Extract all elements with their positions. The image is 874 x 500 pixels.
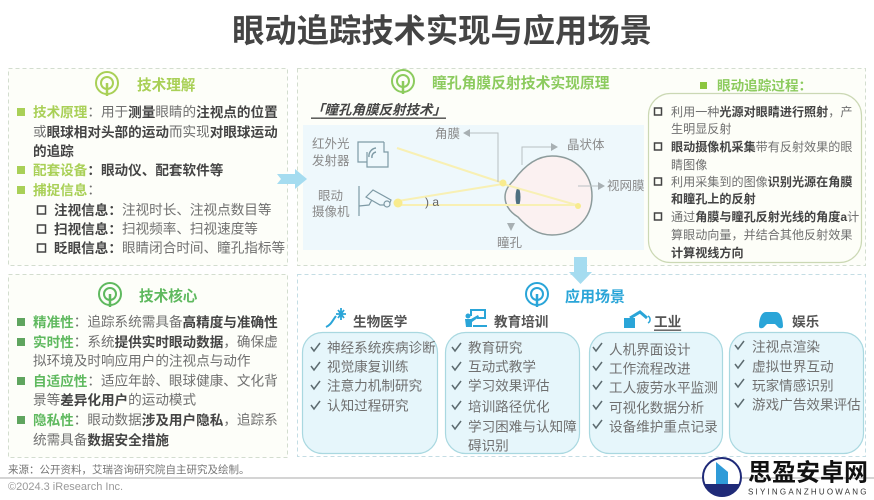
card: education: 教育研究 — [468, 340, 523, 356]
icon: camera — [359, 186, 391, 216]
lens label: 晶状体 — [567, 138, 605, 152]
card: biomedicine: 视觉康复训练 — [327, 358, 409, 374]
process box: 生明显反射 — [671, 121, 731, 136]
process box: 和瞳孔上的反射 — [671, 191, 756, 206]
card: industry — [590, 312, 722, 454]
process box: 利用采集到的图像识别光源在角膜 — [671, 174, 852, 189]
heading: technology core: 技术核心 — [139, 287, 198, 305]
card: industry: 工业 — [654, 314, 681, 330]
heading: application scenarios: 应用场景 — [565, 288, 625, 306]
panel: application scenarios — [298, 274, 866, 456]
eye diagram: 发射器 — [312, 153, 350, 168]
panel: technology core — [8, 274, 288, 458]
card: education: 学习困难与认知障 — [468, 418, 577, 434]
card: education — [446, 309, 580, 454]
icon: robot arm — [624, 312, 650, 328]
process box: 利用一种光源对眼睛进行照射，产 — [671, 104, 852, 119]
card: industry: 工作流程改进 — [609, 362, 691, 376]
icon: infrared emitter — [358, 142, 388, 167]
source note: 来源：公开资料，艾瑞咨询研究院自主研究及绘制。 — [8, 463, 250, 476]
copyright: ©2024.3 iResearch Inc. — [8, 481, 123, 493]
real-time: 实时性：系统提供实时眼动数据，确保虚 — [33, 334, 278, 350]
principle text: 技术原理：用于测量眼睛的注视点的位置 — [33, 104, 278, 120]
arrow: to principle — [277, 169, 307, 189]
icon: signal — [392, 70, 414, 94]
title: 眼动追踪技术实现与应用场景 — [232, 13, 652, 49]
adaptivity: 景等差异化用户的运动模式 — [33, 392, 197, 408]
icon: signal — [96, 72, 118, 96]
card: biomedicine: 神经系统疾病诊断 — [327, 340, 436, 356]
icon: neuron — [326, 308, 346, 327]
captured information list: 眨眼信息：眼睛闭合时间、瞳孔指标等 — [54, 240, 285, 256]
principle text: 的追踪 — [33, 142, 74, 158]
card: industry: 设备维护重点记录 — [609, 418, 718, 434]
card: biomedicine: 注意力机制研究 — [327, 378, 423, 394]
process title: 眼动追踪过程： — [717, 78, 812, 94]
card: industry: 人机界面设计 — [609, 342, 691, 358]
captured information list: 扫视信息：扫视频率、扫视速度等 — [54, 220, 258, 236]
privacy: 隐私性：眼动数据涉及用户隐私，追踪系 — [33, 412, 278, 428]
icon: gamepad — [759, 312, 783, 328]
card: entertainment: 虚拟世界互动 — [752, 360, 834, 374]
privacy: 统需具备数据安全措施 — [33, 432, 169, 448]
adaptivity — [17, 372, 278, 408]
process box: 眼动摄像机采集带有反射效果的眼 — [671, 139, 852, 154]
arrow: to applications — [569, 257, 592, 284]
card: education: 培训路径优化 — [468, 400, 550, 414]
captured information list: 捕捉信息： — [33, 182, 101, 198]
card: biomedicine: 生物医学 — [353, 314, 407, 330]
equipment text: 配套设备：眼动仪、配套软件等 — [33, 162, 224, 178]
card: biomedicine — [302, 308, 438, 454]
pupil label: 瞳孔 — [497, 235, 523, 250]
icon: signal — [526, 283, 548, 307]
heading: implementation principle: 瞳孔角膜反射技术实现原理 — [432, 74, 610, 92]
subheading: pupil corneal reflection: 「瞳孔角膜反射技术」 — [311, 102, 446, 118]
card: industry: 可视化数据分析 — [609, 400, 704, 416]
icon: classroom — [465, 309, 487, 327]
accuracy: 精准性：追踪系统需具备高精度与准确性 — [33, 314, 278, 330]
camera label: 眼动 — [318, 189, 343, 203]
process box: 计算视线方向 — [671, 245, 744, 260]
card: entertainment — [730, 312, 864, 454]
process box: 通过角膜与瞳孔反射光线的角度a计 — [671, 209, 859, 224]
panel: implementation principle — [298, 68, 866, 266]
captured information list — [17, 182, 285, 256]
icon: signal — [99, 283, 121, 307]
process box — [648, 94, 862, 262]
eyeball — [505, 156, 592, 235]
retina label: 视网膜 — [607, 178, 645, 193]
logo: SIYINGANZHUOWANG — [748, 488, 869, 496]
eye diagram: 摄像机 — [312, 204, 350, 219]
angle a: ) a — [425, 195, 439, 209]
cornea label: 角膜 — [435, 127, 460, 141]
card: industry: 工人疲劳水平监测 — [609, 380, 718, 396]
card: education: 教育培训 — [494, 314, 548, 330]
card: entertainment: 注视点渲染 — [752, 340, 820, 354]
captured information list: 注视信息：注视时长、注视点数目等 — [54, 202, 272, 218]
principle text — [17, 104, 278, 158]
card: education: 互动式教学 — [468, 360, 536, 374]
eye diagram — [303, 125, 645, 250]
card: biomedicine: 认知过程研究 — [327, 398, 409, 414]
card: entertainment: 娱乐 — [792, 314, 820, 330]
principle text: 或眼球相对头部的运动而实现对眼球运动 — [33, 124, 278, 140]
real-time: 拟环境及时响应用户的注视点与动作 — [33, 352, 251, 368]
card: entertainment: 游戏广告效果评估 — [752, 398, 861, 412]
card: entertainment: 玩家情感识别 — [752, 378, 834, 394]
light rays — [394, 148, 581, 209]
process box: 睛图像 — [671, 158, 707, 172]
heading: technology understanding: 技术理解 — [137, 77, 196, 94]
adaptivity: 自适应性：适应年龄、眼球健康、文化背 — [33, 372, 278, 388]
privacy — [17, 412, 278, 448]
panel: technology understanding — [8, 68, 288, 266]
card: education: 学习效果评估 — [468, 378, 550, 394]
emitter label: 红外光 — [312, 136, 350, 151]
card: education: 碍识别 — [468, 438, 509, 454]
real-time — [17, 334, 278, 368]
logo — [703, 458, 869, 497]
logo: 思盈安卓网 — [748, 460, 868, 486]
process box: 算眼动向量，并结合其他反射效果 — [671, 227, 852, 242]
